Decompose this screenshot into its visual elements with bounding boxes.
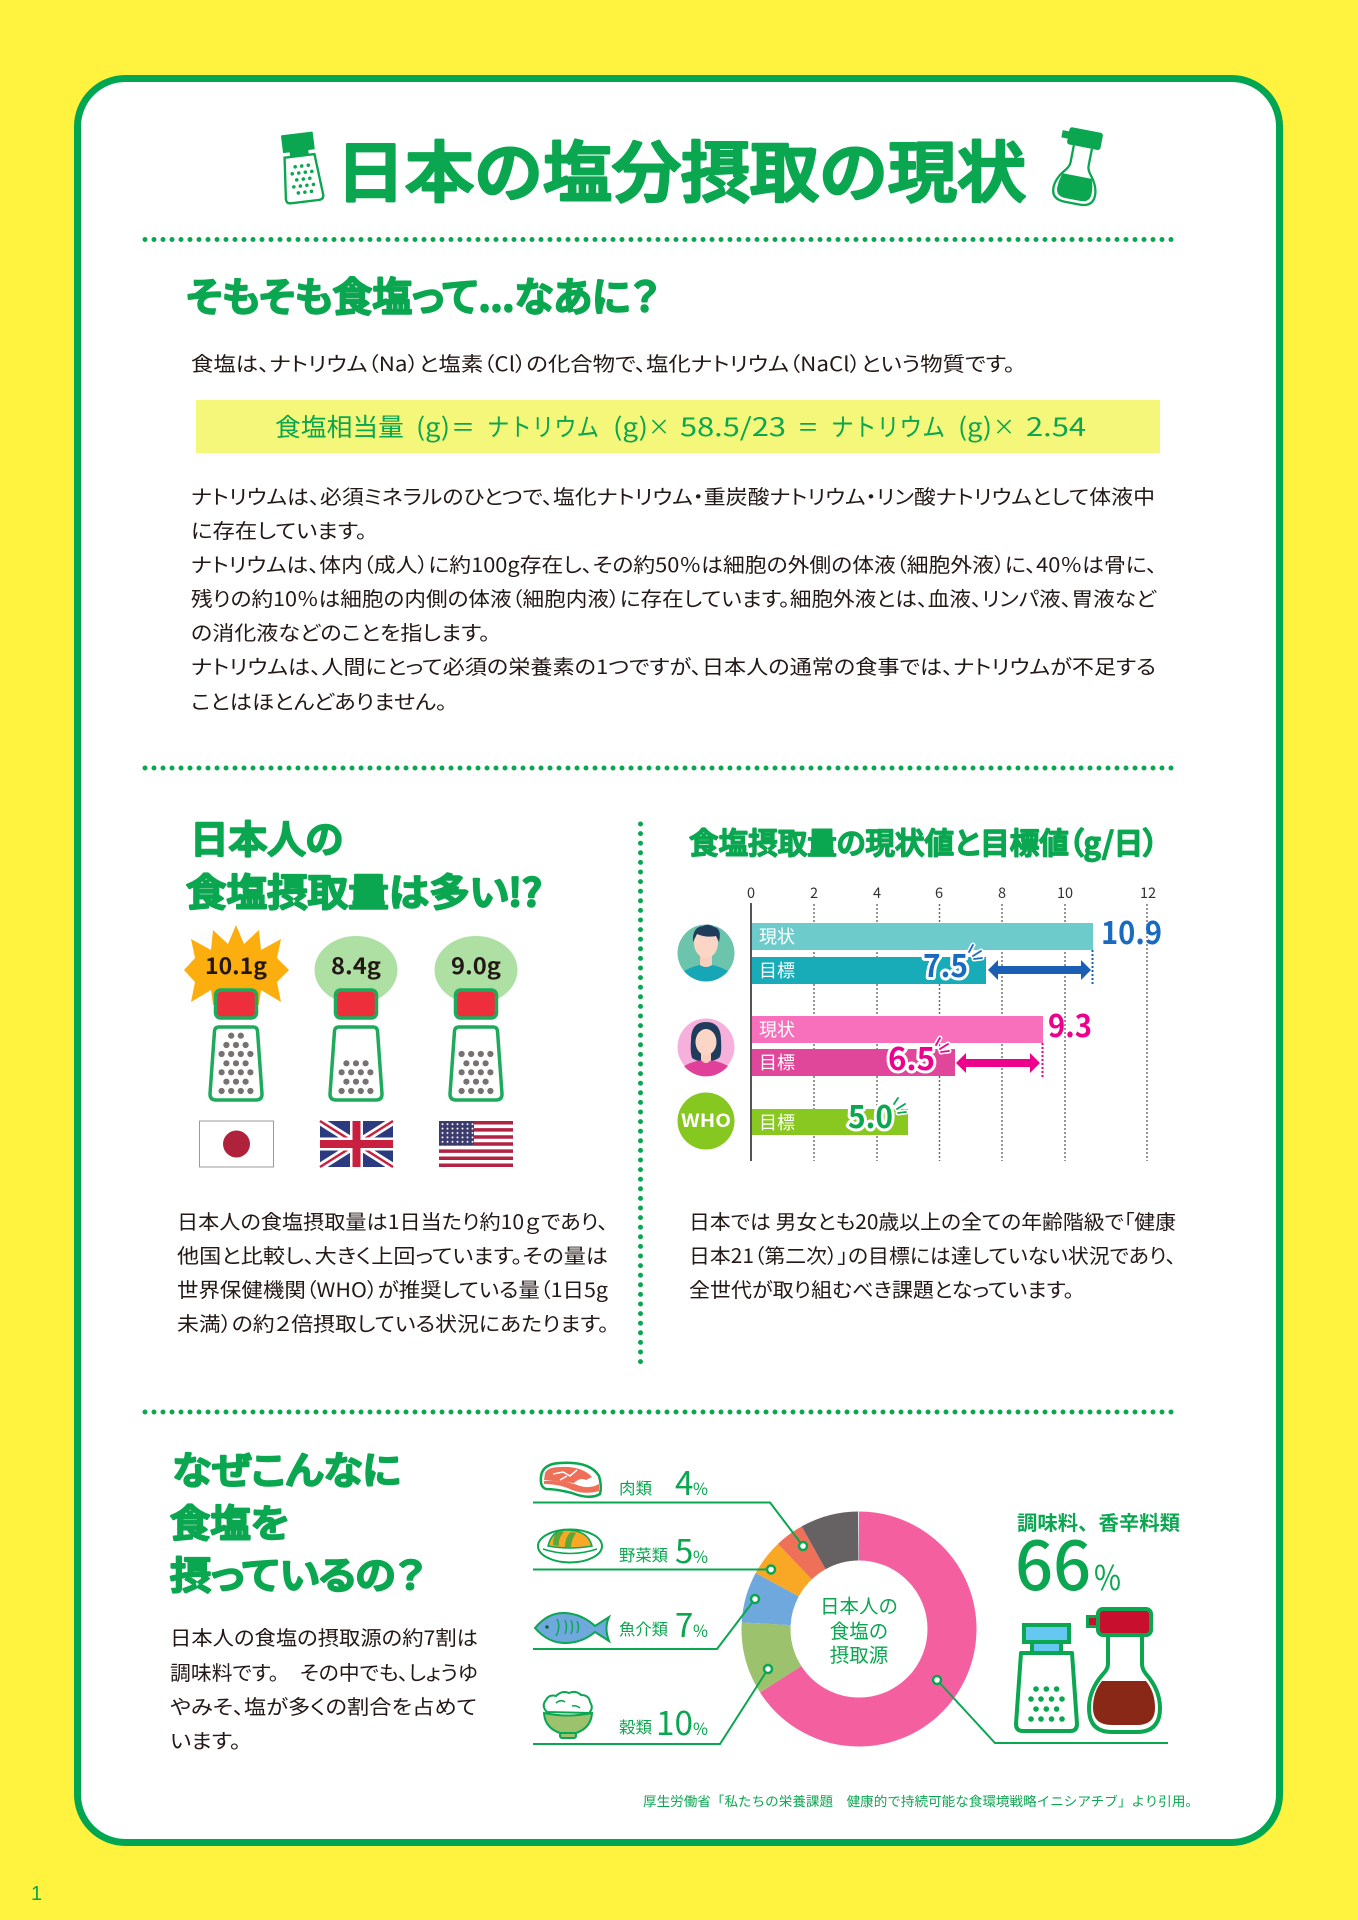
flag: USA — [439, 1121, 513, 1167]
formula box: (g) — [958, 408, 992, 444]
formula box: (g) — [613, 408, 648, 444]
heading: why so much salt: 摂っているの？ — [170, 1545, 425, 1600]
label: grains 10% — [619, 1697, 708, 1745]
label: vegetables 5%: 5 — [675, 1525, 693, 1573]
icon: man — [678, 924, 734, 982]
label: seasonings 66%: 調味料、香辛料類 — [1017, 1507, 1180, 1536]
donut centre label: 食塩の — [830, 1615, 888, 1644]
label: seasonings 66%: % — [1094, 1551, 1121, 1600]
bar: male current: 10.9 — [1101, 908, 1162, 953]
shaker: Japan 10.1g: 10.1g — [205, 949, 267, 981]
heading: main title: 日本の塩分摂取の現状 — [336, 120, 1026, 216]
label: grains 10%: % — [693, 1715, 708, 1740]
divider — [145, 1410, 1177, 1414]
panel: what is salt — [186, 265, 1160, 715]
bar: female target: 6.5 — [888, 1034, 935, 1079]
heading: Japanese intake: 食塩摂取量は多い!? — [186, 862, 542, 917]
divider — [145, 766, 1177, 770]
text: chart description: 全世代が取り組むべき課題となっています。 — [689, 1274, 1074, 1303]
icon: soy sauce bottle large — [1088, 1609, 1160, 1732]
heading: chart title: 食塩摂取量の現状値と目標値（g/日） — [689, 819, 1158, 863]
heading: Japanese intake: 日本人の — [190, 809, 343, 864]
icon: fish — [535, 1613, 609, 1643]
bar: male target — [752, 941, 986, 986]
text: intake description: 他国と比較し、大きく上回っています。その量は — [177, 1240, 608, 1269]
heading: why so much salt: なぜこんなに — [172, 1440, 401, 1495]
label: grains 10%: 穀類 — [619, 1714, 652, 1738]
page number: 1 — [31, 1883, 42, 1905]
heading: why so much salt — [170, 1440, 425, 1600]
text: intake description: 日本人の食塩摂取量は1日当たり約10ｇであり、 — [177, 1206, 608, 1235]
axis ticks: 10 — [1057, 882, 1073, 903]
formula box: 58.5/23 — [680, 408, 786, 444]
axis ticks: 12 — [1140, 882, 1156, 903]
heading: Japanese intake — [186, 809, 542, 917]
icon: rice bowl — [544, 1692, 592, 1738]
text: sodium explanation: ナトリウムは、人間にとって必須の栄養素の1つですが、日本人の通常の食事では、ナトリウムが不足する — [191, 651, 1156, 680]
bar: female target: 目標 — [759, 1049, 795, 1075]
text: chart description: 日本では 男女とも20歳以上の全ての年齢階級で「健康 — [689, 1206, 1176, 1235]
bar: WHO target: 5.0 — [848, 1092, 893, 1137]
shaker: USA 9.0g: 9.0g — [451, 949, 501, 981]
bar: female target — [752, 1034, 955, 1079]
text: intake description — [177, 1206, 609, 1337]
axis ticks — [747, 882, 1156, 1161]
axis ticks: 8 — [998, 882, 1006, 903]
label: seafood 7% — [619, 1599, 708, 1647]
label: meat 4%: 4 — [675, 1457, 693, 1505]
bar: male target: 7.5 — [923, 941, 968, 986]
icon: salt shaker large — [1016, 1625, 1077, 1731]
formula box: ナトリウム — [487, 408, 599, 444]
formula box: = — [799, 408, 817, 444]
title block — [278, 120, 1107, 216]
formula box: ナトリウム — [831, 408, 945, 444]
axis ticks: 4 — [873, 882, 881, 903]
bar: female current: 9.3 — [1048, 1001, 1092, 1046]
label: vegetables 5%: % — [693, 1543, 708, 1568]
text: chart description — [689, 1206, 1176, 1303]
text: sodium explanation: 残りの約10％は細胞の内側の体液（細胞内液）に存在しています。細胞外液とは、血液、リンパ液、胃液など — [191, 583, 1157, 612]
text: salt definition: 食塩は、ナトリウム（Na）と塩素（Cl）の化合物で、塩化ナトリウム（NaCl）という物質です。 — [191, 348, 1015, 377]
axis ticks: 0 — [747, 882, 755, 903]
arrow: male gap — [988, 950, 1092, 985]
label: seasonings 66% — [1015, 1507, 1180, 1610]
text: sodium explanation: に存在しています。 — [191, 515, 367, 544]
panel: salt sources — [170, 1440, 1199, 1810]
label: grains 10%: 10 — [656, 1697, 693, 1745]
text: source citation: 厚生労働省「私たちの栄養課題 健康的で持続可能な食環境戦略イニシアチブ」より引用。 — [643, 1791, 1199, 1810]
formula box: = — [453, 408, 473, 444]
donut chart — [766, 1536, 952, 1722]
text: sodium explanation — [191, 481, 1157, 715]
label: seasonings 66%: 66 — [1015, 1513, 1091, 1610]
label: seafood 7%: 7 — [675, 1599, 693, 1647]
text: sources description: 調味料です。 その中でも、しょうゆ — [170, 1657, 478, 1686]
donut centre label: 日本人の — [820, 1590, 898, 1619]
donut centre label: 摂取源 — [830, 1639, 888, 1668]
label: meat 4%: 肉類 — [619, 1475, 652, 1499]
shaker: UK 8.4g: 8.4g — [331, 949, 381, 981]
text: intake description: 未満）の約２倍摂取している状況にあたります。 — [177, 1308, 609, 1337]
formula box — [196, 400, 1160, 453]
icon: WHO — [678, 1092, 734, 1150]
label: meat 4%: % — [693, 1475, 708, 1500]
label: seafood 7%: % — [693, 1617, 708, 1642]
bar: WHO target: 目標 — [759, 1109, 795, 1135]
panel: salt intake comparison — [177, 809, 609, 1337]
icon: soy sauce bottle — [1049, 126, 1107, 207]
bar chart — [678, 882, 1162, 1161]
arrow: female gap — [956, 1043, 1042, 1078]
label: vegetables 5% — [619, 1525, 708, 1573]
shaker: USA 9.0g — [434, 936, 518, 1100]
icon: WHO: WHO — [681, 1107, 731, 1133]
axis ticks: 2 — [810, 882, 818, 903]
label: seafood 7%: 魚介類 — [619, 1616, 668, 1640]
flag: Japan — [200, 1121, 274, 1167]
icon: meat — [541, 1463, 601, 1497]
bar: male target: 目標 — [759, 957, 795, 983]
formula box: 2.54 — [1026, 408, 1086, 444]
text: sodium explanation: の消化液などのことを指します。 — [191, 617, 490, 646]
icon: woman — [678, 1018, 734, 1076]
text: sources description: やみそ、塩が多くの割合を占めて — [170, 1691, 477, 1720]
icon: pickled vegetables — [538, 1530, 602, 1562]
vertical divider — [638, 824, 643, 1369]
bar: male current: 現状 — [759, 923, 795, 949]
formula box: × — [648, 410, 670, 442]
bar: male current — [752, 908, 1162, 953]
heading: what is salt: そもそも食塩って...なあに？ — [186, 265, 659, 323]
divider — [145, 237, 1177, 242]
label: vegetables 5%: 野菜類 — [619, 1542, 668, 1566]
formula box: × — [993, 410, 1015, 442]
leader lines — [533, 1502, 1168, 1744]
formula box: (g) — [416, 408, 450, 444]
label: meat 4% — [619, 1457, 708, 1505]
text: sources description — [170, 1622, 478, 1754]
shaker: UK 8.4g — [314, 936, 398, 1100]
heading: why so much salt: 食塩を — [170, 1493, 288, 1548]
text: sodium explanation: ナトリウムは、必須ミネラルのひとつで、塩化ナトリウム・重炭酸ナトリウム・リン酸ナトリウムとして体液中 — [191, 481, 1155, 510]
text: sodium explanation: ナトリウムは、体内（成人）に約100g存在し、その約50％は細胞の外側の体液（細胞外液）に、40％は骨に、 — [191, 549, 1157, 578]
text: chart description: 日本21（第二次）」の目標には達していない状況であり、 — [689, 1240, 1176, 1269]
donut centre label — [820, 1590, 898, 1668]
shaker: Japan 10.1g — [184, 925, 289, 1100]
bar: female current: 現状 — [759, 1016, 795, 1042]
text: sodium explanation: ことはほとんどありません。 — [191, 686, 447, 715]
bar: female current — [752, 1001, 1092, 1046]
flag: UK — [320, 1121, 393, 1167]
axis ticks: 6 — [935, 882, 943, 903]
text: sources description: 日本人の食塩の摂取源の約7割は — [170, 1622, 478, 1651]
icon: salt shaker — [278, 131, 324, 204]
text: sources description: います。 — [170, 1725, 241, 1754]
bar: WHO target — [752, 1092, 908, 1137]
text: intake description: 世界保健機関（WHO）が推奨している量（1日5g — [177, 1274, 608, 1303]
formula box: 食塩相当量 — [275, 408, 404, 444]
panel: intake vs target chart — [678, 819, 1176, 1303]
